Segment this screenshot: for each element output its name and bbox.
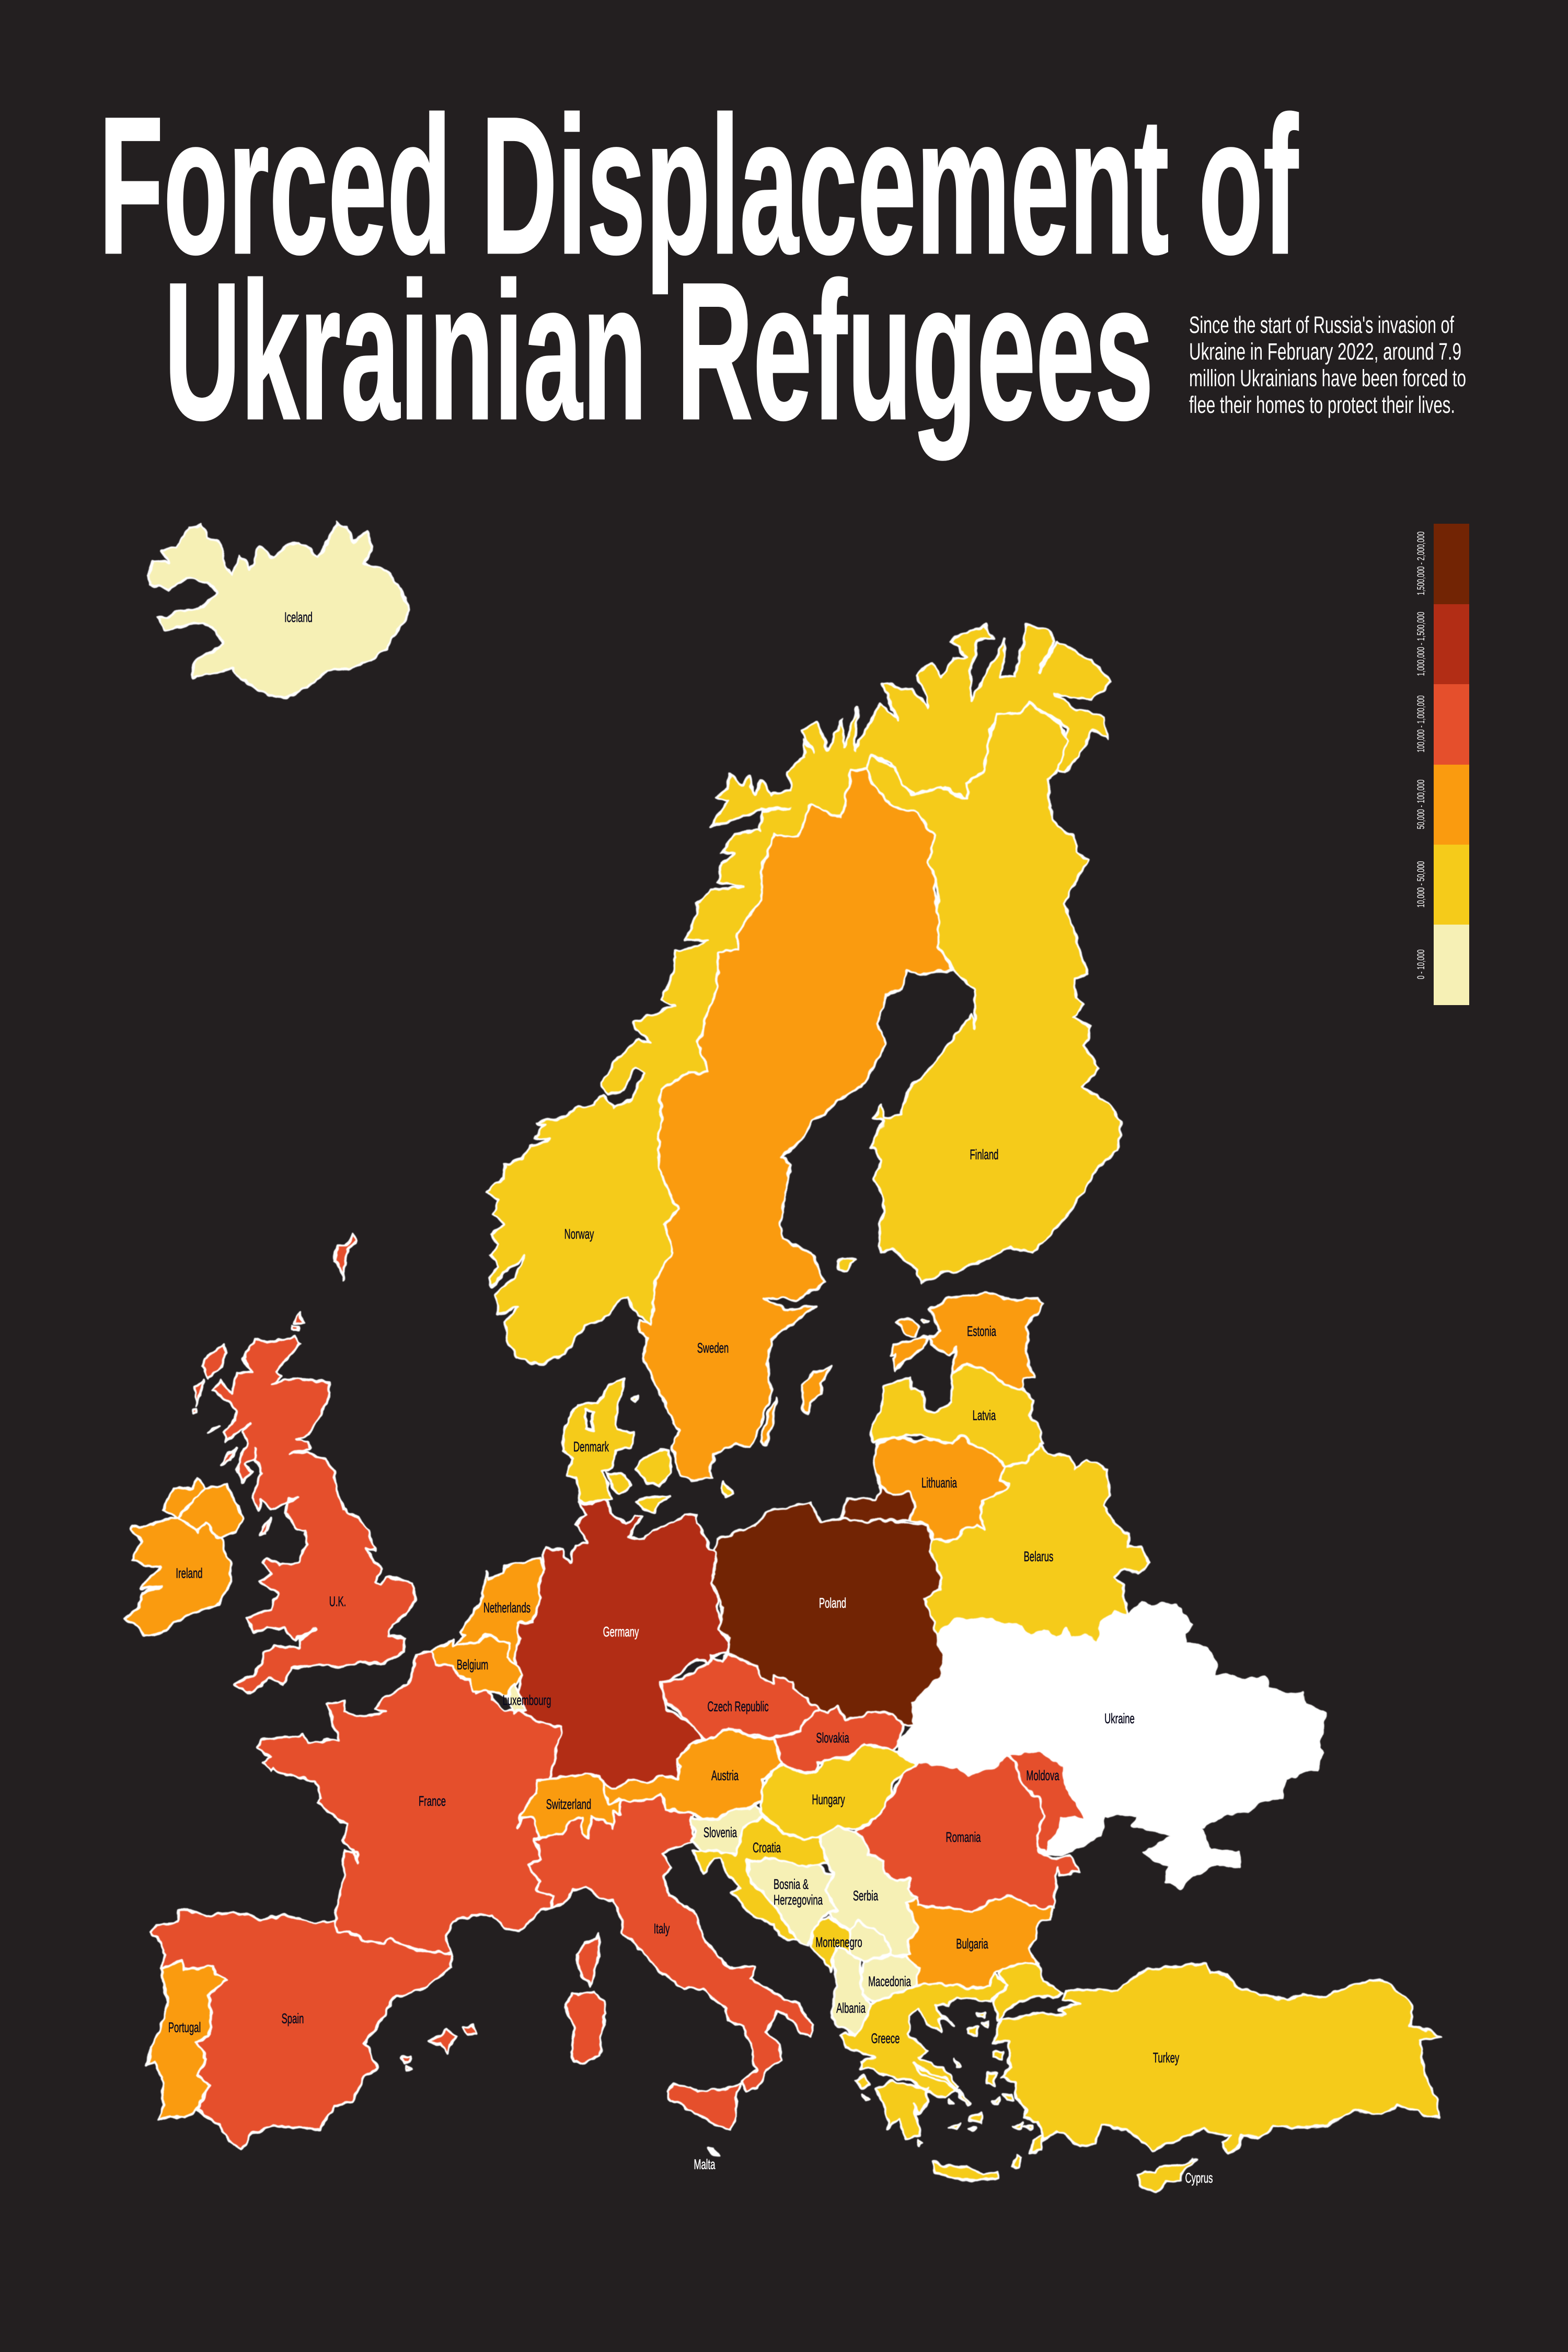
label: France: France [419,1793,446,1809]
country: Iceland [148,522,410,698]
label: Turkey: Turkey [1153,2050,1180,2066]
country: Norway [488,625,1111,1365]
country: Greece [839,1974,1043,2181]
country: Slovenia [689,1804,763,1854]
intro text block: flee their homes to protect their lives. [1189,391,1455,418]
label: Slovakia: Slovakia [816,1730,849,1746]
country: Hungary [761,1743,916,1840]
country: Italy [529,1794,813,2129]
label: Moldova: Moldova [1026,1768,1059,1783]
country: France [259,1652,562,1952]
intro text block [1189,312,1466,418]
label: Croatia: Croatia [753,1840,781,1855]
label: Ukraine: Ukraine [1104,1711,1135,1726]
country: United Kingdom [193,1234,416,1694]
country: Bosnia and Herzegovina [748,1858,837,1945]
label: Czech Republic: Czech Republic [707,1699,769,1714]
legend: 1,000,000 - 1,500,000 [1416,612,1427,676]
label: Sweden: Sweden [697,1340,729,1356]
label: Poland: Poland [819,1595,846,1611]
country: Ireland [124,1479,243,1635]
label: Austria: Austria [711,1768,739,1783]
label: Romania: Romania [946,1829,981,1845]
country: Belarus [925,1445,1149,1643]
label: Serbia: Serbia [853,1888,879,1904]
country: Switzerland [516,1774,620,1838]
label: Cyprus: Cyprus [1185,2170,1213,2186]
label: Albania: Albania [836,2000,866,2016]
country: Spain [152,1908,477,2150]
intro text block: Since the start of Russia's invasion of [1189,312,1454,338]
label: Bulgaria: Bulgaria [956,1936,988,1952]
country: Romania [854,1755,1079,1911]
label: Estonia: Estonia [967,1323,996,1339]
label: Latvia: Latvia [973,1408,996,1423]
label: Lithuania: Lithuania [921,1475,957,1491]
label: Belgium: Belgium [457,1657,488,1673]
country: Kosovo [851,1921,891,1961]
label: Germany: Germany [603,1624,639,1640]
country: Turkey [993,1964,1439,2154]
label: Macedonia: Macedonia [868,1974,911,1989]
country: Latvia [872,1364,1043,1467]
country: Kaliningrad [843,1487,915,1521]
label: Denmark: Denmark [573,1439,609,1455]
legend: 100,000 - 1,000,000 [1416,695,1427,753]
map of Europe [124,522,1439,2192]
country: Luxembourg [510,1684,525,1712]
country: Macedonia [861,1956,918,2003]
label: U.K.: U.K. [329,1594,346,1609]
label: Hungary: Hungary [812,1792,845,1807]
country: Croatia [694,1817,826,1940]
label: Luxembourg: Luxembourg [502,1692,551,1708]
country: Denmark [562,1377,733,1514]
label: Belarus: Belarus [1024,1549,1053,1564]
legend: 1,500,000 - 2,000,000 [1416,532,1427,595]
country: Sweden [639,770,952,1481]
label: Netherlands: Netherlands [483,1600,531,1616]
country: Montenegro [811,1918,851,1970]
label: Iceland: Iceland [284,609,313,625]
country: Portugal [147,1961,226,2119]
legend: 50,000 - 100,000 [1416,780,1427,829]
country: Austria [603,1728,781,1822]
legend: 0 - 10,000 [1416,949,1427,979]
label: Switzerland: Switzerland [546,1796,591,1812]
country: Malta [708,2148,719,2157]
title [99,76,1299,462]
country: Ukraine [898,1602,1325,1889]
legend [1416,524,1469,1005]
label: Portugal: Portugal [168,2020,201,2035]
label: Bosnia and Herzegovina [774,1876,823,1908]
country: Finland [864,702,1121,1285]
label: Bosnia and Herzegovina: Bosnia & [774,1876,809,1892]
country: Cyprus [1138,2159,1196,2192]
legend: 10,000 - 50,000 [1416,861,1427,907]
label: Bosnia and Herzegovina: Herzegovina [774,1892,823,1908]
islands: Aland [837,1256,856,1272]
country: Slovakia [775,1706,904,1771]
label: Slovenia: Slovenia [704,1825,737,1840]
label: Malta: Malta [694,2157,716,2172]
label: Spain: Spain [282,2011,304,2026]
label: Montenegro: Montenegro [815,1934,862,1950]
country: Estonia [891,1293,1043,1388]
country labels [168,609,1213,2186]
country: Bulgaria [906,1896,1052,1988]
country: Poland [710,1503,944,1727]
label: Greece: Greece [871,2031,900,2046]
label: Ireland: Ireland [176,1565,203,1581]
country: Serbia [821,1827,918,1956]
label: Italy: Italy [654,1921,670,1936]
country: Netherlands [455,1559,544,1664]
country: Czech Republic [660,1653,818,1742]
label: Norway: Norway [564,1226,594,1242]
label: Finland: Finland [970,1147,998,1162]
country: Belgium [432,1635,523,1696]
country: Albania [832,1946,871,2035]
country: Germany [508,1501,729,1789]
country: Lithuania [874,1436,1009,1540]
country: Moldova [1008,1751,1086,1853]
islands: Gotland, Oland [763,1367,831,1444]
